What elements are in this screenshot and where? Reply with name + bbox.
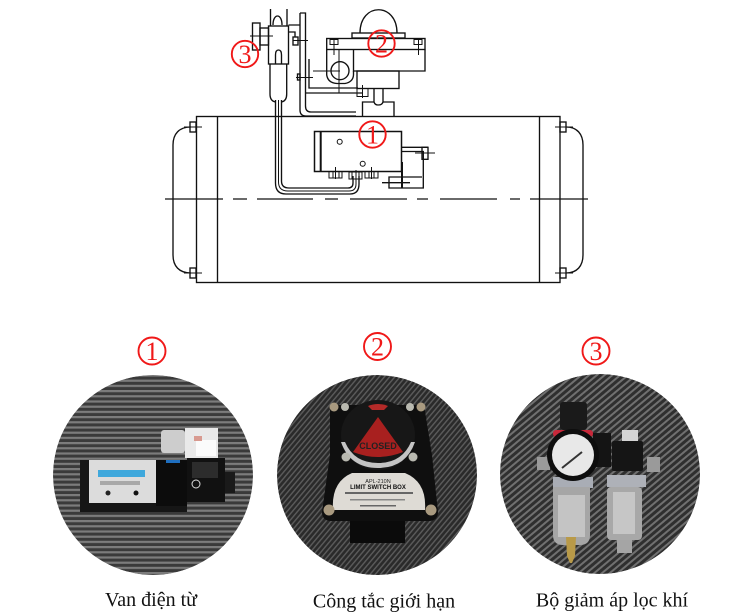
technical drawing: actuator with accessories xyxy=(165,9,588,282)
label: Bộ giảm áp lọc khí: Bộ giảm áp lọc khí xyxy=(536,590,689,612)
callout number 3 on drawing: 3 xyxy=(238,40,252,69)
callout number 2 on drawing xyxy=(368,30,395,58)
number 3: 3 xyxy=(590,337,602,366)
number 1 xyxy=(138,337,166,366)
panel: limit switch xyxy=(277,332,477,612)
panel: solenoid valve xyxy=(53,337,253,611)
callout number 2 on drawing: 2 xyxy=(375,30,388,58)
actuator body xyxy=(165,116,588,282)
number 2: 2 xyxy=(371,332,384,362)
air pipe xyxy=(276,100,359,194)
photo: limit switch box xyxy=(277,375,477,575)
number 3 xyxy=(582,337,610,366)
callout number 1 on drawing xyxy=(359,120,386,150)
callout number 3 on drawing xyxy=(232,40,258,69)
label: Van điện từ: Van điện từ xyxy=(105,589,198,611)
photo: limit switch box: LIMIT SWITCH BOX xyxy=(350,485,406,491)
air filter regulator drawing xyxy=(250,9,288,102)
limit switch drawing xyxy=(313,10,425,116)
number 1: 1 xyxy=(146,337,158,366)
photo: limit switch box: APL-210N xyxy=(365,479,391,485)
label: Công tắc giới hạn: Công tắc giới hạn xyxy=(313,590,455,612)
photo: solenoid valve xyxy=(53,375,253,575)
callout number 1 on drawing: 1 xyxy=(366,120,379,150)
mounting bracket drawing xyxy=(288,13,363,116)
panel: air filter regulator xyxy=(500,337,700,612)
solenoid valve drawing xyxy=(314,132,435,188)
photo: air filter regulator xyxy=(500,374,700,574)
number 2 xyxy=(364,332,391,362)
photo: limit switch box: CLOSED xyxy=(359,441,397,451)
